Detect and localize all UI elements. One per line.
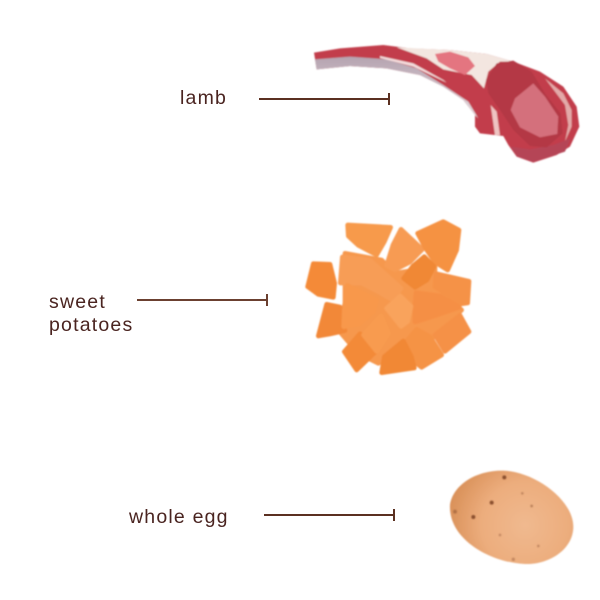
leader line: whole egg [264, 509, 394, 521]
label: sweet potatoes: sweet [49, 291, 106, 313]
icon: sweet potato cubes [308, 222, 469, 373]
icon: whole egg [450, 471, 573, 564]
label: whole egg: whole egg [128, 506, 229, 528]
icon: lamb chop [314, 45, 579, 163]
label: lamb: lamb [180, 87, 227, 109]
leader line: lamb [259, 93, 389, 105]
leader line: sweet potatoes [137, 294, 267, 306]
infographic canvas: potatoes [49, 314, 133, 336]
